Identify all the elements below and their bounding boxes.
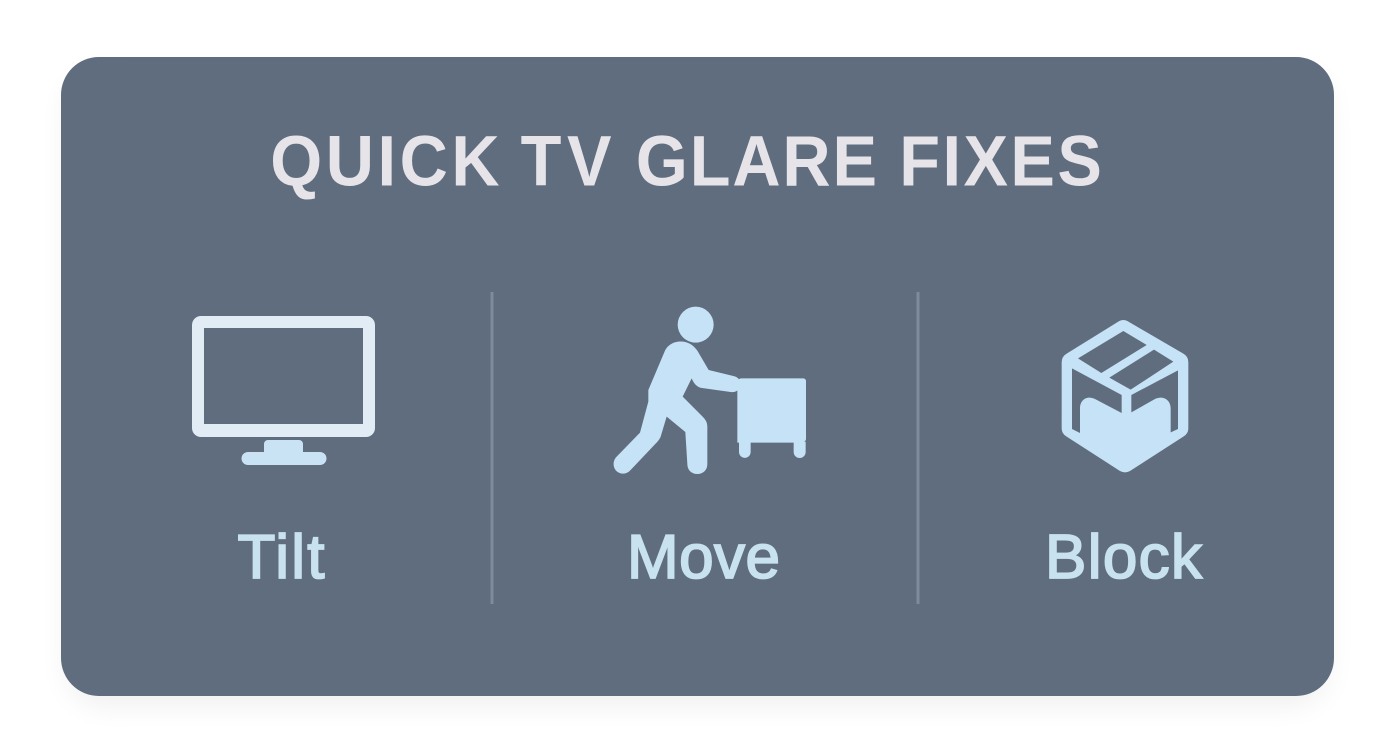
panel: quick fixes card	[61, 57, 1334, 696]
title: TV	[521, 122, 641, 201]
icon: TV monitor	[192, 316, 375, 465]
icon: person moving furniture	[614, 307, 806, 474]
title: FIXES	[899, 122, 1104, 201]
label: Tilt: Tilt	[238, 523, 324, 592]
label: Move: Move	[627, 523, 780, 592]
title: QUICK	[270, 122, 525, 201]
label: Block: Block	[1045, 523, 1203, 592]
icon: box	[1062, 320, 1188, 472]
title: GLARE	[636, 122, 899, 201]
